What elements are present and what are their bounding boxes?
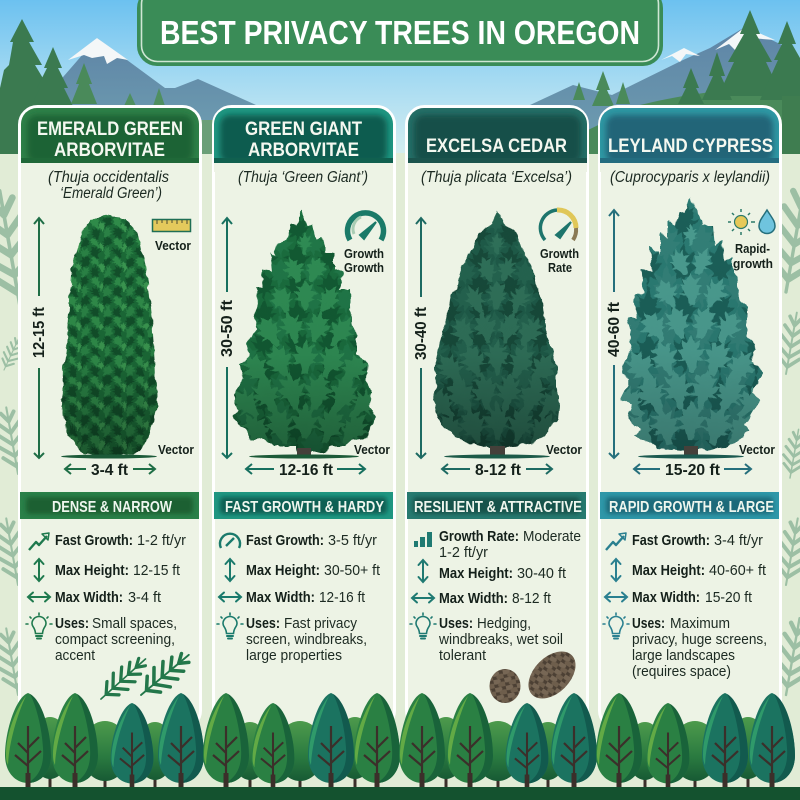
panel 2 facts: Max Width: <box>246 589 315 606</box>
panel: Emerald Green Arborvitae <box>20 106 200 728</box>
panel 2 facts <box>217 532 381 664</box>
panel 1 header: ARBORVITAE <box>54 140 165 161</box>
panel 2 facts: Max Height: <box>246 562 320 579</box>
icon: height arrow <box>418 560 428 582</box>
panel 1 height dimension: 12-15 ft <box>31 306 48 358</box>
panel 4 width dimension <box>634 462 751 479</box>
panel 3 facts: Max Width: <box>439 590 508 607</box>
panel 3 header: EXCELSA CEDAR <box>426 136 567 157</box>
panel 1 facts: Small spaces, <box>92 615 177 632</box>
right fern fronds <box>763 180 800 698</box>
panel 1 facts: 3-4 ft <box>128 589 162 606</box>
panel 2 width dimension: 12-16 ft <box>279 462 334 479</box>
panel 3 facts: Moderate <box>523 528 581 545</box>
panel 4 facts: Uses: <box>632 615 665 632</box>
panel 1 facts: Max Height: <box>55 562 129 579</box>
panel 1 facts: 1-2 ft/yr <box>137 532 186 549</box>
panel 2 scientific name: (Thuja ‘Green Giant’) <box>238 169 368 186</box>
panel 2 tree illustration <box>232 210 376 458</box>
panel 1 facts <box>26 532 186 664</box>
panel 3 tree illustration <box>433 210 560 458</box>
panel 2 facts: large properties <box>246 647 342 664</box>
panel 2 header <box>214 108 393 172</box>
panel 3 facts: Uses: <box>439 615 473 632</box>
icon: sun and water drop <box>728 209 775 235</box>
panel 3 facts: 1-2 ft/yr <box>439 544 488 561</box>
panel 1 scientific name: ‘Emerald Green’) <box>60 185 162 202</box>
panel: Leyland Cypress <box>600 106 780 728</box>
icon: width arrow <box>605 592 627 602</box>
panel 3 facts: 30-40 ft <box>517 565 567 582</box>
gauge label: Growth <box>344 246 384 261</box>
panel 4 scientific name: (Cuprocyparis x leylandii) <box>610 169 770 186</box>
sun and drop label: growth <box>733 256 773 271</box>
panel 1 facts: Uses: <box>55 615 89 632</box>
icon: width arrow <box>219 592 241 602</box>
sun and drop label <box>733 241 773 271</box>
icon: height arrow <box>612 559 620 581</box>
icon: height arrow <box>34 559 44 581</box>
gauge label: Rate <box>548 260 572 275</box>
panel 4 facts: large landscapes <box>632 647 735 664</box>
panel 2 facts: Fast Growth: <box>246 532 324 549</box>
panel 1 scientific name: (Thuja occidentalis <box>48 169 169 186</box>
panel 2 facts: 3-5 ft/yr <box>328 532 377 549</box>
tree base label: Vector <box>739 442 775 457</box>
panel 3 tagline bar <box>407 492 586 519</box>
panel 2 height dimension <box>219 218 236 458</box>
background bushes <box>30 717 768 787</box>
title banner <box>137 0 663 66</box>
panel: Excelsa Cedar <box>406 106 588 728</box>
panel 1 tree illustration <box>61 215 157 458</box>
panel 3 width dimension <box>442 462 552 479</box>
panel 4 facts: (requires space) <box>632 663 731 680</box>
panel 4 height dimension: 40-60 ft <box>606 301 623 357</box>
left fern fronds <box>0 186 44 697</box>
panel 2 facts: Fast privacy <box>284 615 357 632</box>
icon: width arrow <box>412 594 434 602</box>
gauge label <box>540 246 579 275</box>
panel 4 facts <box>603 532 767 680</box>
panel 3 width dimension: 8-12 ft <box>475 462 522 479</box>
panel 4 header <box>600 108 779 172</box>
panel 4 width dimension: 15-20 ft <box>665 462 721 479</box>
panel 4 facts: 15-20 ft <box>705 589 753 606</box>
icon: gauge <box>348 213 384 240</box>
title: BEST PRIVACY TREES IN OREGON <box>160 14 640 51</box>
panel: Green Giant Arborvitae <box>214 106 394 728</box>
panel 1 facts: accent <box>55 647 96 664</box>
panel 1 scientific name <box>48 169 169 202</box>
panel 1 tagline bar: DENSE & NARROW <box>52 499 172 516</box>
panel 3 facts: 8-12 ft <box>512 590 552 607</box>
panel 3 facts <box>410 528 581 664</box>
panel 4 header: LEYLAND CYPRESS <box>608 136 773 157</box>
panel 2 facts: 30-50+ ft <box>324 562 381 579</box>
panel 2 tagline bar <box>214 492 393 519</box>
icon: width arrow <box>28 592 50 602</box>
panel 1 facts: compact screening, <box>55 631 175 648</box>
panel 4 facts: 40-60+ ft <box>709 562 767 579</box>
tree base label: Vector <box>354 442 390 457</box>
panel 1 facts: Max Width: <box>55 589 123 606</box>
panel 3 tagline bar: RESILIENT & ATTRACTIVE <box>414 499 582 516</box>
panel 3 facts: Growth Rate: <box>439 528 519 545</box>
ground strip <box>0 787 800 800</box>
panel 4 tagline bar <box>600 492 779 519</box>
panel 2 facts: Uses: <box>246 615 280 632</box>
panel 1 width dimension: 3-4 ft <box>91 462 129 479</box>
tree base label: Vector <box>546 442 582 457</box>
panel 1 tagline bar <box>20 492 199 519</box>
icon: arborvitae sprigs <box>94 645 197 707</box>
icon: pine cones <box>490 642 585 708</box>
right mountains <box>530 27 800 154</box>
panel 4 facts: Max Width: <box>632 589 700 606</box>
panel 1 header <box>21 108 199 172</box>
left mountains <box>30 38 270 154</box>
left conifers <box>0 19 165 154</box>
icon: light bulb <box>26 613 52 638</box>
panel 1 height dimension <box>31 218 48 458</box>
panel 4 facts: privacy, huge screens, <box>632 631 767 648</box>
background: sky <box>0 0 800 155</box>
panel 1 facts: 12-15 ft <box>133 562 181 579</box>
panel 3 facts: Hedging, <box>477 615 531 632</box>
ruler label: Vector <box>155 238 191 253</box>
icon: light bulb <box>217 613 243 638</box>
sun and drop label: Rapid- <box>735 241 770 256</box>
panel 3 height dimension: 30-40 ft <box>413 306 430 360</box>
gauge label: Growth <box>344 260 384 275</box>
panel 2 width dimension <box>246 462 365 479</box>
panel 2 height dimension: 30-50 ft <box>219 299 236 357</box>
icon: growth arrow <box>606 533 626 550</box>
tree base label: Vector <box>158 442 194 457</box>
panel 4 facts: Maximum <box>670 615 730 632</box>
icon: light bulb <box>603 613 629 638</box>
icon: light bulb <box>410 613 436 638</box>
panel 3 facts: tolerant <box>439 647 487 664</box>
panel 3 facts: Max Height: <box>439 565 513 582</box>
icon: growth arrow <box>29 533 49 550</box>
panel 2 facts: screen, windbreaks, <box>246 631 367 648</box>
panel 4 height dimension <box>606 210 623 458</box>
foreground tree row <box>5 693 795 787</box>
icon: gauge <box>540 210 576 240</box>
right conifers <box>573 10 800 154</box>
panel 1 width dimension <box>65 462 155 479</box>
panel 2 header: GREEN GIANT <box>245 119 362 140</box>
panel 4 tree illustration <box>620 198 763 458</box>
panel 4 facts: Fast Growth: <box>632 532 710 549</box>
panel 2 header: ARBORVITAE <box>248 140 359 161</box>
panel 2 facts: 12-16 ft <box>319 589 366 606</box>
panel 3 scientific name: (Thuja plicata ‘Excelsa’) <box>421 169 572 186</box>
panel 3 height dimension <box>413 218 430 458</box>
icon: growth bars <box>414 532 432 547</box>
icon: ruler <box>152 220 190 232</box>
panel 2 tagline bar: FAST GROWTH & HARDY <box>225 499 385 516</box>
panel 1 facts: Fast Growth: <box>55 532 133 549</box>
gauge label: Growth <box>540 246 579 261</box>
panel 3 header <box>408 108 587 172</box>
panel 3 facts: windbreaks, wet soil <box>438 631 563 648</box>
panel 4 facts: Max Height: <box>632 562 705 579</box>
icon: speedometer <box>220 534 240 548</box>
panel 1 header: EMERALD GREEN <box>37 119 183 140</box>
panel 4 facts: 3-4 ft/yr <box>714 532 763 549</box>
gauge label <box>344 246 384 275</box>
icon: height arrow <box>226 559 234 581</box>
